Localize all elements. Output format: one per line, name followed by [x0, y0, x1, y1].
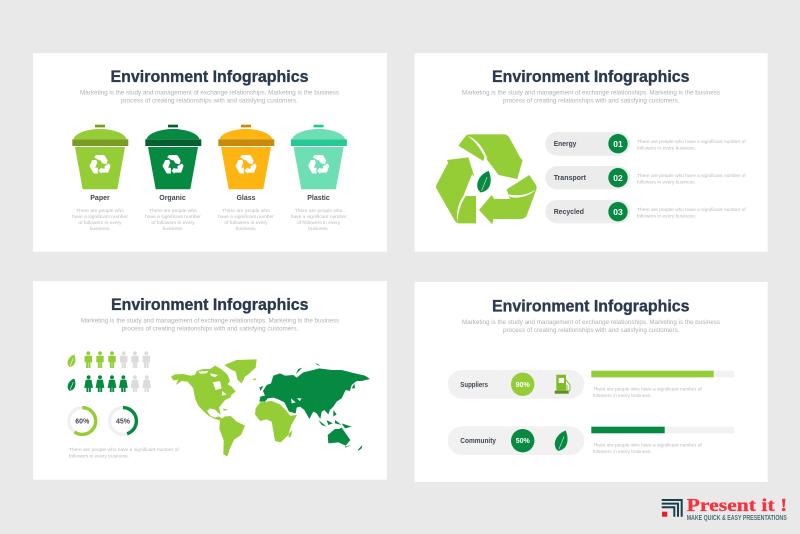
text: suppliers description: followers in every business.: [593, 393, 652, 399]
subtitle: recycling slide: Marketing is the study and management of exchange relationships. Marketing is the business: [462, 90, 721, 97]
row: suppliers: Suppliers: [460, 382, 488, 389]
text: plastic description: business.: [308, 226, 329, 232]
text: suppliers description: [593, 387, 702, 399]
label: plastic: Plastic: [307, 195, 330, 202]
map: eurasia and oceania: [259, 363, 370, 451]
text: recycled description: There are people who have a significant number of: [637, 207, 746, 213]
subtitle: bins slide: Marketing is the study and management of exchange relationships. Marketing is the business: [80, 90, 340, 97]
text: transport description: followers in every business.: [637, 179, 696, 185]
subtitle: map slide: [81, 318, 340, 333]
row: recycled: 03: [613, 207, 623, 217]
text: transport description: [637, 173, 746, 185]
row: energy: [545, 132, 630, 156]
pictogram: male row: [85, 351, 150, 368]
text: paper description: business.: [90, 226, 110, 232]
label: organic: Organic: [159, 195, 186, 202]
text: organic description: There are people who: [149, 208, 197, 214]
heading: bins slide: Environment Infographics: [110, 67, 308, 86]
icon: dark leaf: [68, 378, 75, 391]
donut: 45%: [110, 408, 136, 434]
subtitle: progress slide: Marketing is the study and management of exchange relationships. Marketing is the business: [462, 319, 721, 326]
label: glass: Glass: [236, 195, 256, 202]
bin: glass: [218, 125, 274, 189]
text: community description: There are people who have a significant number of: [593, 443, 702, 449]
text: organic description: have a significant number: [145, 214, 201, 220]
text: transport description: There are people who have a significant number of: [637, 173, 746, 179]
text: plastic description: [291, 208, 347, 232]
map: inland water: [198, 371, 302, 403]
subtitle: bins slide: process of creating relationships with and satisfying customers.: [121, 98, 298, 105]
row: recycled: Recycled: [554, 209, 584, 216]
bin: plastic: [291, 125, 347, 189]
text: recycled description: [637, 207, 746, 219]
pictogram: female row: [84, 375, 151, 392]
text: map description: followers in every business.: [69, 454, 129, 460]
world map: [171, 359, 370, 456]
row: energy: Energy: [554, 141, 576, 148]
text: recycled description: followers in every business.: [637, 213, 696, 219]
subtitle: progress slide: process of creating relationships with and satisfying customers.: [503, 327, 680, 334]
row: transport: Transport: [554, 175, 587, 182]
text: paper description: [72, 208, 128, 232]
row: community: [448, 426, 584, 455]
donut: 45%: 45%: [116, 418, 131, 426]
heading: progress slide: Environment Infographics: [492, 297, 690, 316]
text: glass description: of followers in every: [224, 220, 268, 226]
bin: organic: [145, 125, 201, 189]
row: energy: 01: [613, 139, 623, 149]
subtitle: recycling slide: [462, 90, 721, 105]
icon: centre leaf: [477, 171, 491, 192]
row: suppliers: [448, 370, 584, 399]
row: community: Community: [460, 438, 496, 445]
row: transport: 02: [613, 173, 623, 183]
text: map description: [69, 447, 179, 460]
text: plastic description: have a significant number: [291, 214, 347, 220]
bin: paper: [72, 125, 128, 189]
heading: map slide: Environment Infographics: [111, 295, 308, 314]
subtitle: map slide: process of creating relationships with and satisfying customers.: [122, 326, 298, 333]
text: glass description: business.: [236, 226, 256, 232]
icon: logo mark: [662, 499, 683, 517]
subtitle: map slide: Marketing is the study and management of exchange relationships. Marketing is the business: [81, 318, 340, 325]
text: plastic description: There are people who: [295, 208, 343, 214]
text: organic description: business.: [163, 226, 183, 232]
row: suppliers: 90%: [516, 382, 530, 389]
subtitle: progress slide: [462, 319, 721, 334]
text: energy description: [637, 139, 746, 151]
text: energy description: followers in every business.: [637, 145, 696, 151]
text: community description: [593, 443, 702, 455]
row: recycled: [545, 200, 630, 223]
bar: community: [591, 427, 734, 433]
text: paper description: have a significant number: [72, 214, 128, 220]
donut: 60%: [69, 408, 96, 434]
icon: leaf: [555, 430, 568, 451]
text: glass description: have a significant number: [218, 214, 274, 220]
map: americas and africa: [171, 359, 297, 456]
subtitle: bins slide: [80, 90, 340, 105]
panel: recycling symbol: [415, 53, 768, 252]
text: organic description: of followers in every: [151, 220, 195, 226]
text: community description: followers in every business.: [593, 449, 652, 455]
text: glass description: [218, 208, 274, 232]
panel: progress bars: [415, 282, 768, 482]
icon: fuel pump: [555, 375, 570, 394]
heading: recycling slide: Environment Infographics: [492, 67, 690, 86]
icon: light leaf: [68, 354, 75, 367]
panel: recycling bins: [33, 53, 387, 252]
text: glass description: There are people who: [222, 208, 270, 214]
text: plastic description: of followers in every: [297, 220, 341, 226]
panel: world map: [33, 281, 387, 480]
text: organic description: [145, 208, 201, 232]
subtitle: recycling slide: process of creating relationships with and satisfying customers.: [503, 98, 680, 105]
row: community: 50%: [516, 438, 530, 445]
donut: 60%: 60%: [75, 418, 90, 426]
text: paper description: of followers in every: [78, 220, 122, 226]
row: transport: [545, 166, 630, 189]
bar: suppliers: [591, 371, 734, 377]
wordmark: Present it !: [687, 495, 787, 515]
icon: recycling arrows with leaf: [436, 134, 537, 224]
logo: Present it: [662, 495, 787, 522]
text: suppliers description: There are people who have a significant number of: [593, 387, 702, 393]
text: energy description: There are people who have a significant number of: [637, 139, 746, 145]
text: paper description: There are people who: [76, 208, 124, 214]
label: paper: Paper: [90, 195, 110, 202]
text: map description: There are people who have a significant number of: [69, 447, 179, 453]
